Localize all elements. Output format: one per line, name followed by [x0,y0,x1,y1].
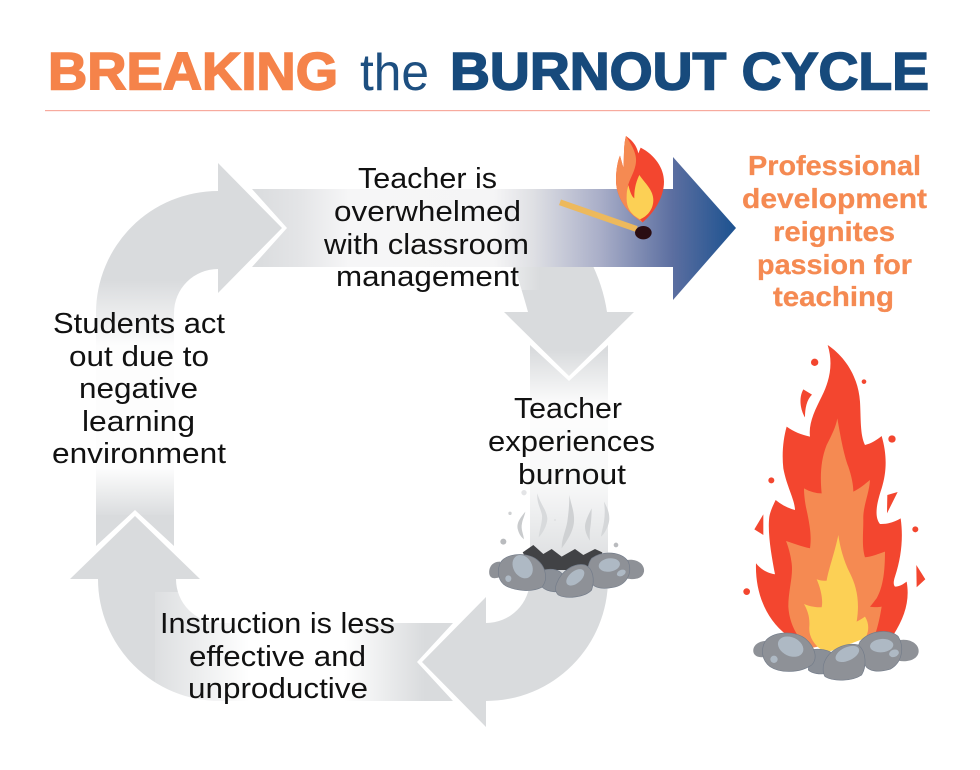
charred wood [523,545,602,570]
text: students act out: environment [52,438,226,470]
text: instruction less effective: Instruction is less [160,608,395,640]
sparks [743,359,925,595]
arrow: burnout to instruction [422,345,608,727]
text: teacher overwhelmed: management [336,261,519,293]
text: teacher overwhelmed: overwhelmed [334,196,521,228]
text: students act out: out due to [69,341,209,373]
arrow: overwhelmed to burnout [504,260,634,376]
icon: lit match [560,136,664,239]
rocks [489,551,644,597]
text: instruction less effective: effective and [189,641,366,673]
text: professional development: Professional [748,150,921,181]
title: BURNOUT CYCLE [450,42,929,102]
text: instruction less effective [160,608,395,705]
icon: burnt-out embers with smoke [489,490,644,597]
middle orange flame [786,418,885,648]
arrow: top gradient to navy [252,157,736,300]
icon: roaring bonfire [743,345,925,680]
match flame [616,136,664,222]
text: teacher burnout: burnout [518,459,626,491]
text: students act out [52,308,226,470]
text: teacher burnout: experiences [488,426,655,458]
text: students act out: Students act [53,308,225,340]
title [48,42,929,102]
text: teacher overwhelmed: Teacher is [358,163,497,195]
text: professional development: teaching [773,281,894,312]
title: the [360,44,429,102]
title: BREAKING [48,42,338,102]
arrow: students to teacher [96,163,282,546]
outer red flame [756,345,908,635]
text: professional development: passion for [757,249,912,280]
text: teacher overwhelmed [323,163,529,293]
cycle arrows [70,157,736,727]
text: professional development [742,150,927,312]
rocks [753,641,767,657]
match stick [560,202,637,229]
text: students act out: negative [79,373,198,405]
text: instruction less effective: unproductive [188,673,368,705]
text: professional development: reignites [773,216,895,247]
text: students act out: learning [82,406,195,438]
text: teacher burnout [488,393,655,491]
arrow: instruction to students [70,516,453,701]
text: teacher burnout: Teacher [514,393,622,425]
text: professional development: development [742,183,927,214]
text: teacher overwhelmed: with classroom [323,229,529,261]
match head [635,226,652,239]
inner yellow flame [804,535,868,653]
smoke wisps [500,490,618,570]
